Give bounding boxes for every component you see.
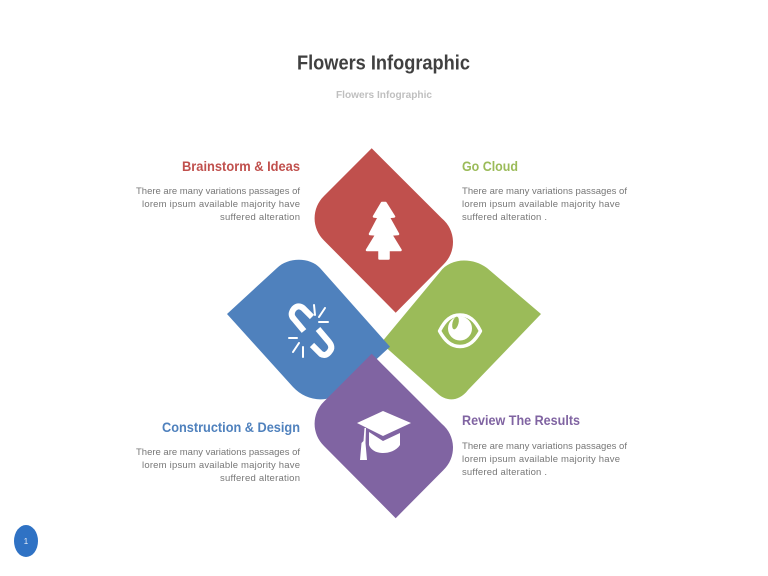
- text block: Brainstorm & Ideas: Brainstorm & Ideas: [182, 158, 300, 174]
- panel: blue petal: [227, 260, 390, 399]
- icon: graduation cap: [357, 411, 411, 460]
- icon: tree: [367, 203, 400, 258]
- text block: Review The Results: Review The Results: [462, 412, 580, 428]
- text block: Go Cloud: [462, 158, 627, 223]
- text block: Brainstorm & Ideas: [136, 158, 300, 223]
- text block: Construction & Design: [136, 419, 300, 484]
- panel: purple petal: [315, 354, 453, 518]
- text block: Brainstorm & Ideas: There are many variations passages of: [136, 186, 300, 197]
- text block: Go Cloud: Go Cloud: [462, 158, 518, 174]
- title: Flowers Infographic: [297, 52, 470, 74]
- text block: Go Cloud: There are many variations passages of: [462, 186, 627, 197]
- text block: Construction & Design: There are many variations passages of: [136, 447, 300, 458]
- text block: Brainstorm & Ideas: suffered alteration: [220, 212, 300, 223]
- text block: Brainstorm & Ideas: lorem ipsum available majority have: [142, 199, 300, 210]
- text block: Construction & Design: Construction & Design: [162, 419, 300, 435]
- text block: Go Cloud: lorem ipsum available majority have: [462, 199, 620, 210]
- panel: red petal: [315, 148, 453, 313]
- text block: Review The Results: There are many variations passages of: [462, 441, 627, 452]
- text block: Construction & Design: lorem ipsum available majority have: [142, 460, 300, 471]
- subtitle: Flowers Infographic: [336, 89, 432, 101]
- icon: broken chain link: [289, 305, 331, 357]
- page number badge: 1: [24, 537, 29, 546]
- text block: Go Cloud: suffered alteration .: [462, 212, 547, 223]
- text block: Review The Results: lorem ipsum available majority have: [462, 454, 620, 465]
- panel: green petal: [381, 261, 541, 399]
- text block: Review The Results: [462, 412, 627, 478]
- text block: Construction & Design: suffered alteration: [220, 473, 300, 484]
- page number badge: [14, 525, 38, 557]
- text block: Review The Results: suffered alteration .: [462, 467, 547, 478]
- icon: eye: [440, 315, 480, 346]
